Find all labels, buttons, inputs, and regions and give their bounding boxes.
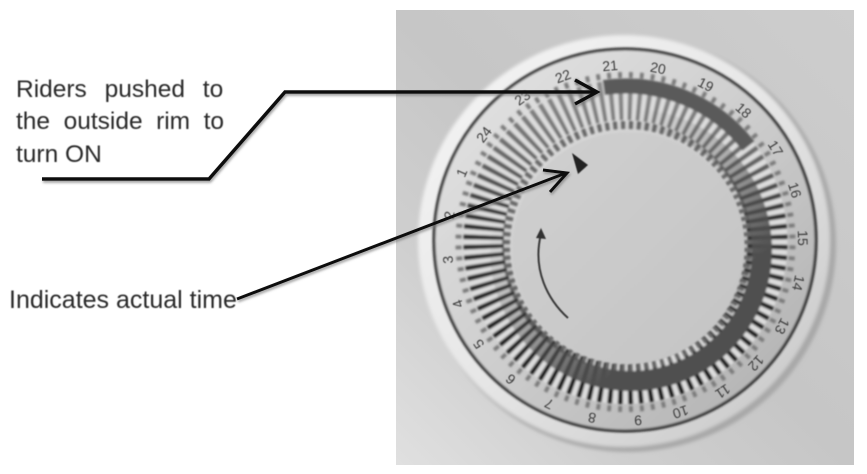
hour numerals: 10: [670, 402, 690, 422]
rider ring: [449, 66, 802, 418]
dial face: [434, 49, 816, 431]
hour numerals: 11: [712, 381, 733, 402]
photo panel: timer mounted on wall: [396, 10, 854, 465]
hour numerals: 15: [795, 230, 811, 246]
hour numerals: 23: [511, 86, 534, 109]
hour numerals: 2: [441, 210, 458, 220]
hour numerals: 21: [602, 57, 619, 74]
inner disc: [512, 132, 744, 364]
outer bezel: [418, 35, 836, 452]
hour numerals: 19: [695, 74, 717, 95]
text: riders description: Riders pushed to: [16, 76, 223, 103]
time pointer triangle: [572, 153, 588, 174]
hour numerals: 8: [586, 409, 597, 426]
hour numerals: 5: [470, 336, 487, 352]
arrow: actual time label to pointer: [237, 170, 567, 299]
icon: rotation direction arrow: [536, 228, 568, 318]
hour numerals: [439, 57, 811, 429]
hour numerals: 16: [785, 180, 805, 200]
hour numerals: 20: [649, 59, 667, 77]
hour numerals: 13: [771, 316, 793, 337]
hour numerals: 1: [453, 166, 470, 179]
text: riders description: [16, 76, 224, 168]
hour numerals: 24: [473, 123, 495, 145]
hour numerals: 9: [633, 412, 643, 429]
hour numerals: 18: [733, 99, 755, 122]
hour numerals: 7: [542, 395, 556, 413]
hour numerals: 3: [439, 255, 456, 264]
timer dial: [418, 35, 836, 452]
text: riders description: the outside rim to: [16, 108, 224, 135]
hour numerals: 22: [553, 66, 573, 86]
text: riders description: turn ON: [16, 141, 102, 168]
hour numerals: 12: [745, 352, 767, 375]
hour numerals: 14: [789, 274, 808, 293]
hour numerals: 17: [765, 137, 787, 159]
arrow: riders label to rim: [42, 80, 597, 179]
text: actual time description: Indicates actual time: [9, 286, 237, 314]
hour numerals: 6: [502, 371, 519, 388]
hour numerals: 4: [449, 297, 467, 310]
